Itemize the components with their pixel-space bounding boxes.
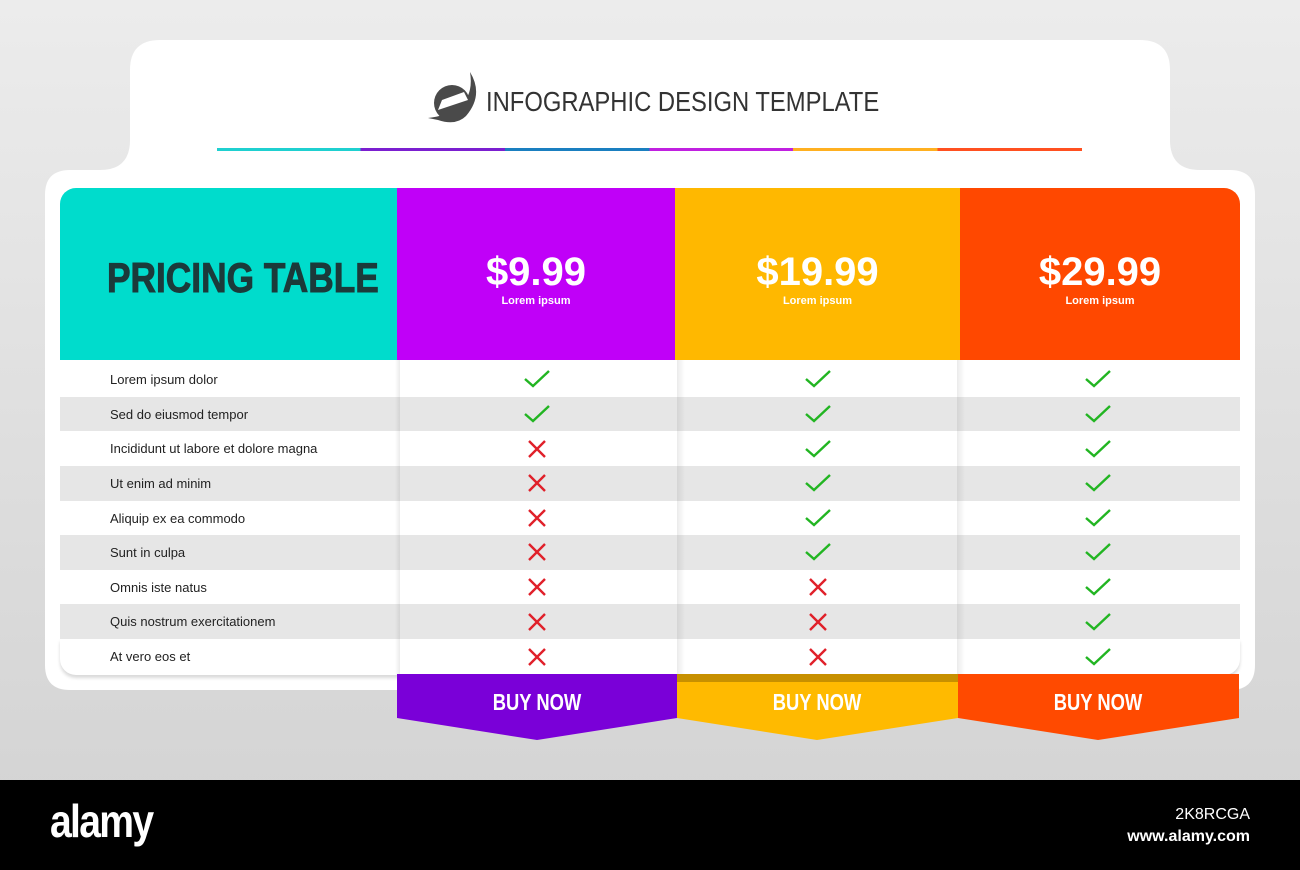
table rows: At vero eos et xyxy=(110,649,190,664)
header: plan 3 xyxy=(960,188,1240,360)
title xyxy=(428,72,879,122)
divider line xyxy=(217,148,1082,151)
table rows: Ut enim ad minim xyxy=(110,476,211,491)
button: buy now 2 xyxy=(677,674,958,740)
button: buy now 1 xyxy=(397,674,677,740)
table rows: Omnis iste natus xyxy=(110,580,207,595)
header: plan 2 xyxy=(675,188,960,360)
table rows: Sunt in culpa xyxy=(110,545,185,560)
button: buy now 3 xyxy=(958,674,1239,740)
header: plan 2: $19.99 xyxy=(756,250,879,294)
header: plan 3: Lorem ipsum xyxy=(1065,295,1135,307)
button: buy now 2: BUY NOW xyxy=(773,689,861,715)
footer bar: www.alamy.com xyxy=(1127,828,1250,845)
header: plan 1: Lorem ipsum xyxy=(501,295,571,307)
table rows: Sed do eiusmod tempor xyxy=(110,407,248,422)
table rows: Quis nostrum exercitationem xyxy=(110,614,275,629)
header: plan 1 xyxy=(397,188,675,360)
footer bar: alamy xyxy=(50,795,152,847)
title: INFOGRAPHIC DESIGN TEMPLATE xyxy=(486,86,879,117)
footer bar xyxy=(0,780,1300,870)
footer bar: 2K8RCGA xyxy=(1175,806,1250,823)
header: plan 3: $29.99 xyxy=(1039,250,1161,294)
header: plan 1: $9.99 xyxy=(486,250,586,294)
table rows: Aliquip ex ea commodo xyxy=(110,511,245,526)
icon: logo xyxy=(428,72,476,122)
table rows: Incididunt ut labore et dolore magna xyxy=(110,441,317,456)
table header: pricing table xyxy=(60,188,397,360)
button: buy now 1: BUY NOW xyxy=(493,689,581,715)
button: buy now 3: BUY NOW xyxy=(1054,689,1142,715)
header: plan 2: Lorem ipsum xyxy=(783,295,852,307)
table rows: Lorem ipsum dolor xyxy=(110,372,218,387)
table header: pricing table: PRICING TABLE xyxy=(107,254,379,301)
